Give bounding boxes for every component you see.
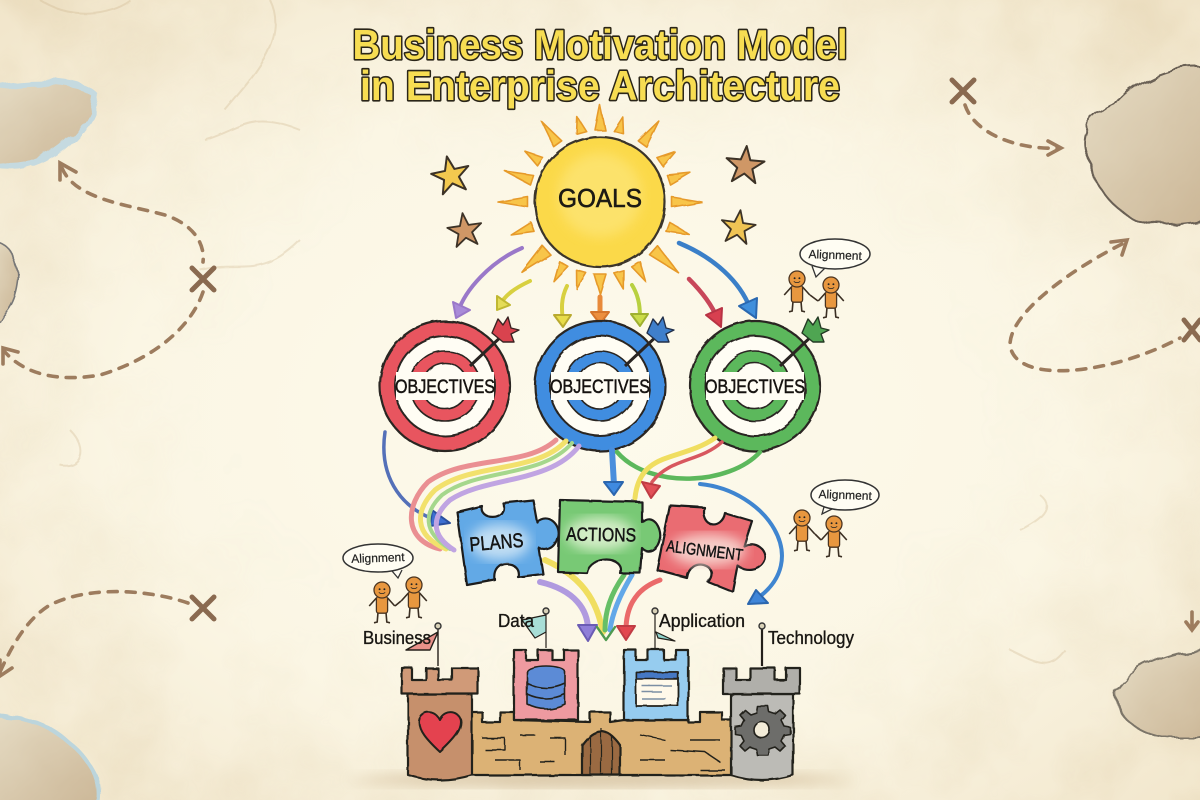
- castle: [402, 612, 800, 780]
- people with alignment bubble: right: [789, 480, 879, 557]
- title: Business Motivation Model: [352, 21, 848, 68]
- flag: data: [522, 612, 546, 648]
- target: blue objectives: OBJECTIVES: [550, 377, 650, 398]
- flag: application: [655, 612, 675, 648]
- rainbow and connecting arrows: [384, 432, 782, 641]
- people with alignment bubble: left: [343, 544, 427, 623]
- decorative stars: [428, 144, 766, 248]
- sun rays: [498, 105, 702, 294]
- target: green objectives: [690, 317, 829, 451]
- tower: data: [514, 650, 578, 720]
- flagpole knobs: [435, 608, 765, 629]
- flag: business: [406, 628, 438, 666]
- flagpole: technology: [761, 628, 763, 666]
- target: green objectives: OBJECTIVES: [705, 377, 805, 398]
- castle labels: Application: [659, 611, 745, 631]
- puzzle piece: actions: [558, 500, 660, 573]
- island: bottom left: [0, 715, 98, 800]
- castle labels: Data: [498, 611, 535, 631]
- puzzle piece: alignment: ALIGNMENT: [665, 537, 744, 565]
- people with alignment bubble: right: Alignment: [818, 487, 873, 503]
- people with alignment bubble: left: Alignment: [351, 550, 405, 566]
- island: middle left: [0, 240, 19, 322]
- puzzle piece: alignment: [657, 505, 765, 592]
- target: red objectives: [380, 317, 519, 451]
- title: in Enterprise Architecture: [360, 62, 840, 109]
- castle labels: [363, 611, 854, 648]
- X marks on the trails: [192, 80, 1200, 619]
- ground shadow: [345, 771, 855, 788]
- island: bottom right: [1115, 648, 1200, 738]
- castle labels: Technology: [768, 628, 854, 648]
- tower: business: [402, 668, 478, 780]
- puzzle piece: plans: [457, 500, 559, 585]
- arrows: goals to objectives: [453, 243, 757, 327]
- puzzle piece: plans: PLANS: [469, 530, 524, 556]
- target: blue objectives: [535, 317, 674, 451]
- treasure map dashed trails: [0, 105, 1198, 676]
- people with alignment bubble: top right: [784, 239, 870, 318]
- tower: application: [624, 650, 688, 720]
- island: top left: [0, 83, 95, 166]
- puzzle piece: actions: ACTIONS: [566, 524, 636, 547]
- castle wall with gate: [470, 712, 732, 775]
- people with alignment bubble: top right: Alignment: [808, 247, 863, 263]
- target: red objectives: OBJECTIVES: [395, 377, 495, 398]
- tower: technology: [723, 668, 800, 780]
- title: [352, 21, 848, 109]
- castle labels: Business: [363, 628, 431, 648]
- sun: goals: GOALS: [558, 183, 642, 213]
- sun: goals: [498, 105, 702, 294]
- island: top right: [1084, 67, 1200, 225]
